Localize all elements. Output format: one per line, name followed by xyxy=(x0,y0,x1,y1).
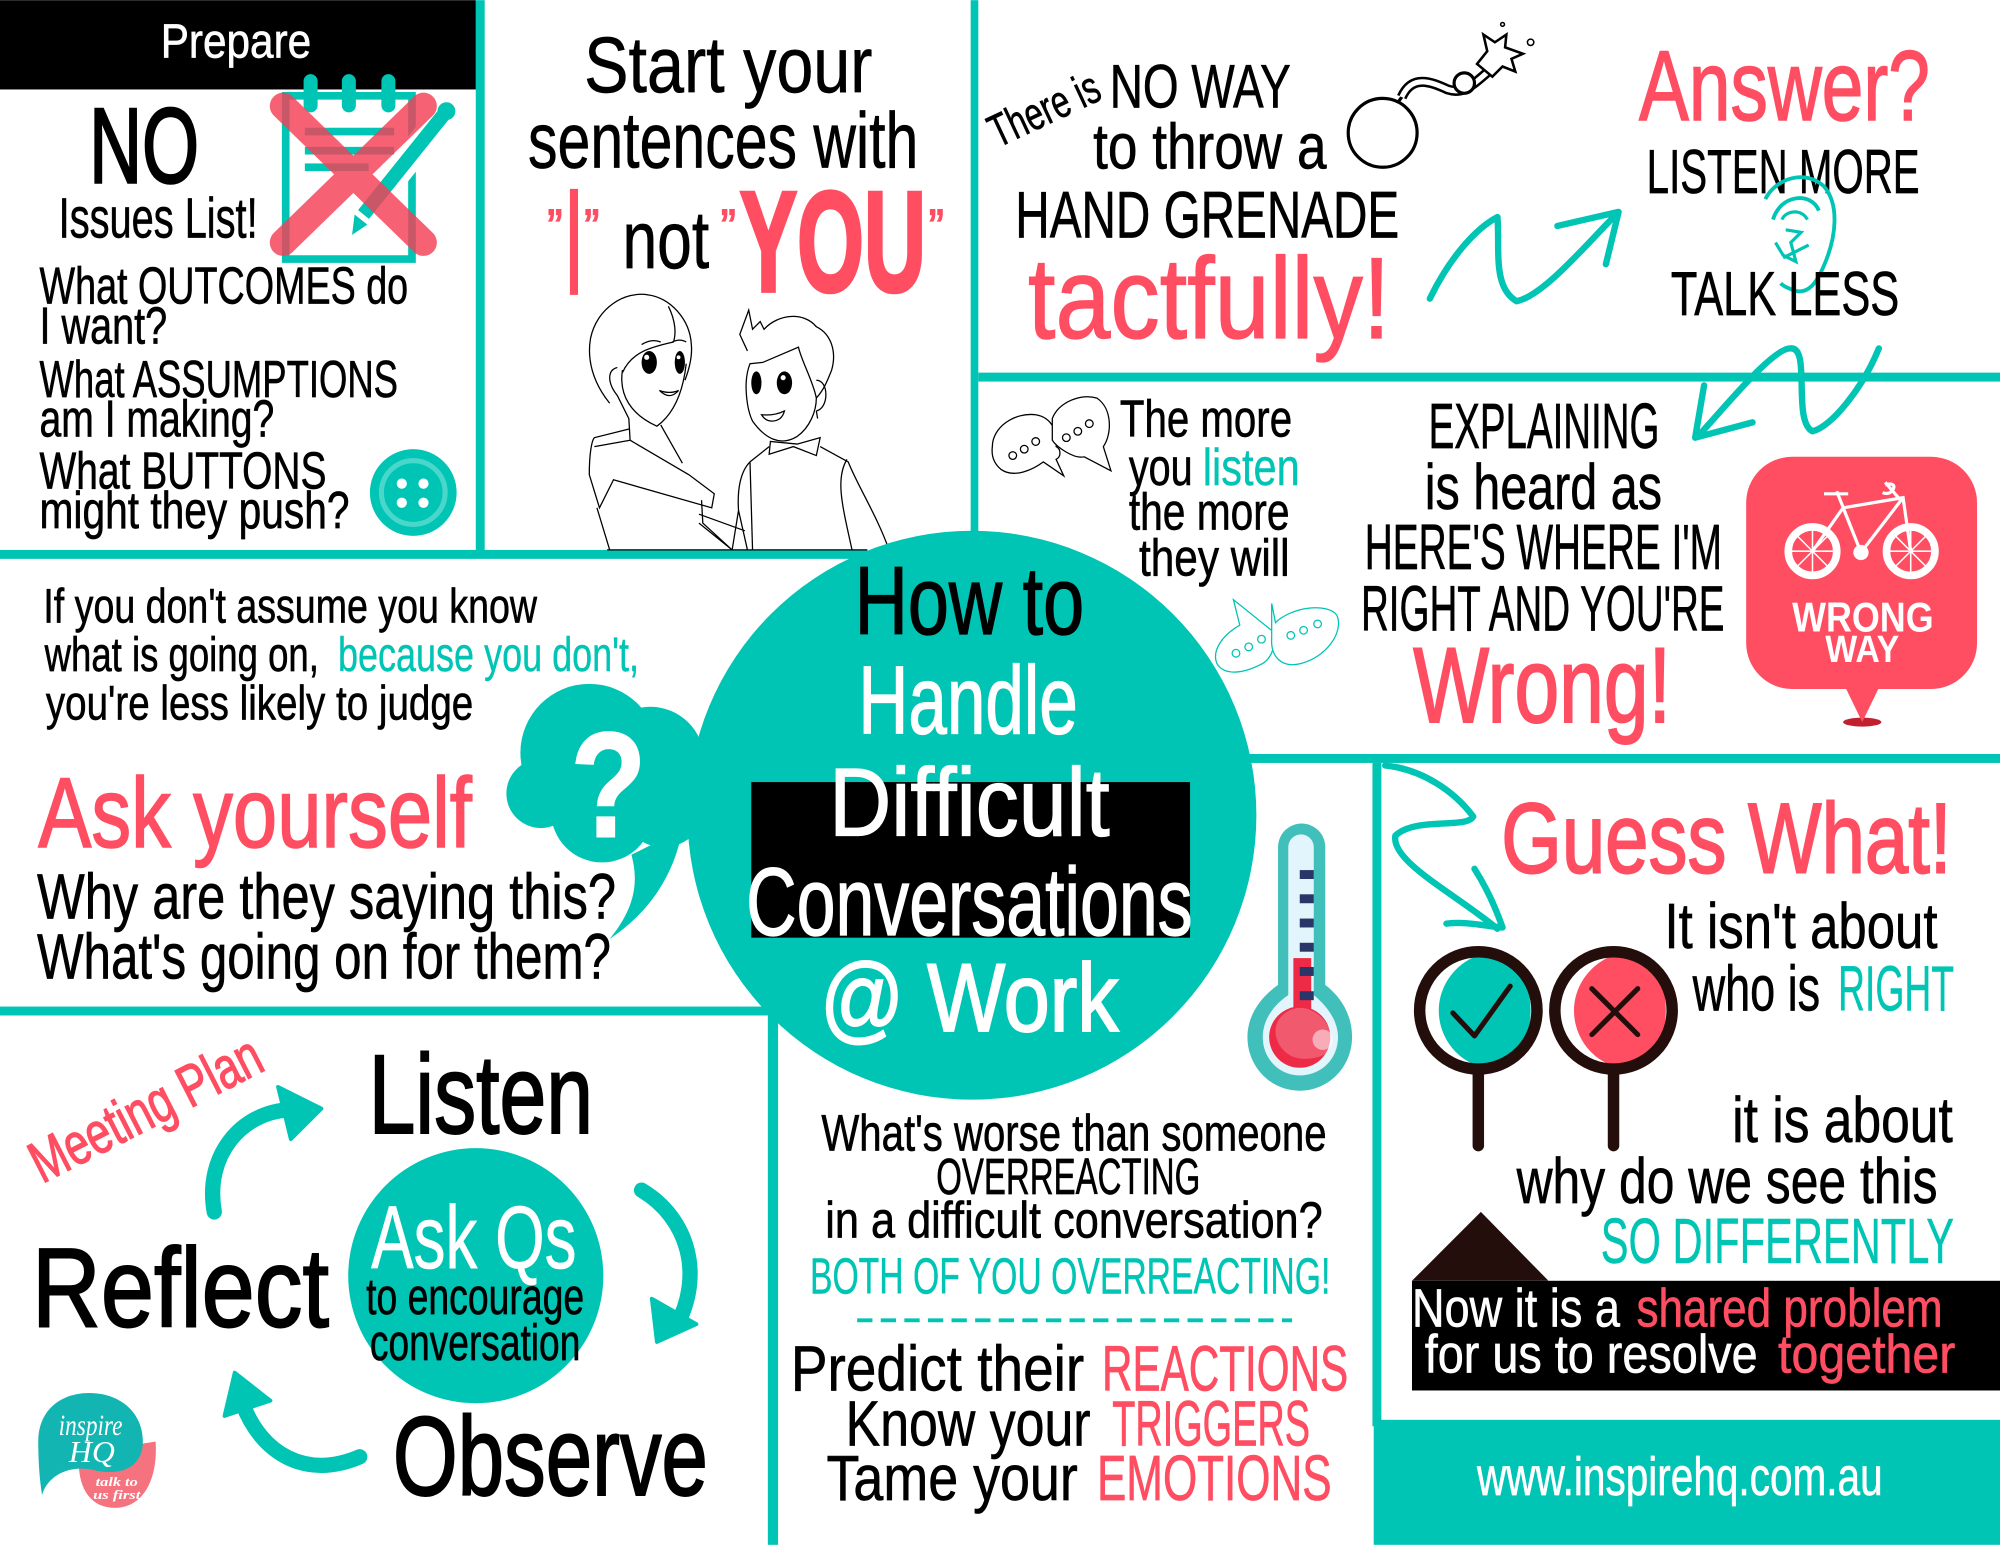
arrow: explaining to guess what xyxy=(1385,765,1503,929)
text: preparation questions: What ASSUMPTIONS xyxy=(40,351,398,409)
panel: overreacting xyxy=(791,1105,1348,1514)
text: reflect: Reflect xyxy=(32,1225,329,1351)
callout: shared problem: together xyxy=(1778,1326,1955,1385)
icon: wrong way sign: WRONG xyxy=(1792,594,1934,641)
text: it isn't about who is right: It isn't about xyxy=(1665,890,1938,962)
panel: the more you listen xyxy=(992,390,1339,672)
text: no way to throw a hand grenade: to throw a xyxy=(1093,111,1327,183)
panel: hand grenade xyxy=(980,22,1534,363)
text: the more you listen: they will xyxy=(1139,529,1290,587)
text: it isn't about who is right: who is xyxy=(1692,952,1820,1024)
text: assumptions paragraph: because you don't, xyxy=(338,628,639,682)
text: preparation questions: am I making? xyxy=(40,390,274,448)
text: predict know tame: Predict their xyxy=(791,1332,1084,1404)
text: I not YOU: not xyxy=(622,195,709,286)
text: There is: There is xyxy=(980,60,1108,157)
logo: inspire HQ xyxy=(38,1393,156,1508)
footer: website: www.inspirehq.com.au xyxy=(1476,1448,1883,1507)
icon: button xyxy=(370,449,457,536)
text: what's worse: OVERREACTING xyxy=(936,1148,1200,1205)
title text: Difficult xyxy=(829,748,1110,857)
icon: tick magnifier xyxy=(1420,952,1537,1146)
title text: Handle xyxy=(858,646,1078,755)
text: Issues List: Issues List! xyxy=(59,186,258,249)
panel: ask yourself xyxy=(37,580,639,992)
text: I not YOU: ” xyxy=(547,199,562,256)
text: the more you listen: The more xyxy=(1120,390,1292,448)
icon: ear xyxy=(1765,177,1835,291)
text: preparation questions: I want? xyxy=(40,297,167,355)
ask questions circle: conversation xyxy=(370,1314,580,1371)
icon: crossed out notepad xyxy=(283,74,455,259)
title circle xyxy=(506,531,1256,1100)
icon: wrong way sign xyxy=(1746,457,1977,727)
icon: bomb xyxy=(1348,22,1534,167)
text: start your sentences with: Start your xyxy=(584,20,872,109)
text: meeting plan: Meeting Plan xyxy=(18,1023,273,1195)
text: observe: Observe xyxy=(393,1393,708,1519)
text: preparation questions xyxy=(40,258,408,540)
panel: explaining xyxy=(1361,390,1977,745)
footer: website xyxy=(1374,1420,2000,1545)
text: predict know tame: Tame your xyxy=(827,1442,1078,1514)
text: it is about why xyxy=(1516,1084,1954,1277)
ask questions circle: to encourage xyxy=(366,1268,584,1325)
illustration: couple talking xyxy=(589,294,889,550)
text: explaining is heard as: is heard as xyxy=(1425,451,1662,523)
text: explaining is heard as: EXPLAINING xyxy=(1429,390,1659,462)
panel: prepare xyxy=(0,0,476,540)
icon: teal speech bubbles xyxy=(1216,600,1339,672)
decorative triangle xyxy=(1412,1212,1548,1281)
title text: @ Work xyxy=(820,943,1119,1052)
text: predict know tame: Know your xyxy=(846,1387,1091,1459)
callout: shared problem xyxy=(1412,1280,2000,1390)
text: why are they saying this xyxy=(37,861,616,992)
callout: shared problem: shared problem xyxy=(1636,1280,1943,1339)
text: I not YOU: I xyxy=(566,163,582,322)
text: NO: NO xyxy=(89,86,199,206)
icon: black speech bubbles xyxy=(992,397,1111,476)
text: what's worse: in a difficult conversation? xyxy=(825,1191,1323,1248)
text: what's worse: What's worse than someone xyxy=(821,1105,1327,1162)
text: explaining is heard as: HERE'S WHERE I'M xyxy=(1365,511,1722,583)
arrow: listen to observe xyxy=(642,1190,696,1342)
text: talk less: TALK LESS xyxy=(1671,259,1899,329)
text: start your sentences with: sentences with xyxy=(528,95,918,184)
text: it is about why: it is about xyxy=(1732,1084,1953,1156)
text: start your sentences with xyxy=(528,20,918,184)
text: assumptions paragraph: you're less likely to judge xyxy=(46,677,473,731)
icon: thermometer xyxy=(1247,824,1352,1091)
ask questions circle xyxy=(348,1148,603,1403)
logo: inspire HQ: inspire xyxy=(59,1410,122,1442)
text: explaining is heard as: RIGHT AND YOU'RE xyxy=(1361,572,1724,644)
callout: shared problem: for us to resolve xyxy=(1425,1326,1758,1385)
panel: guess what xyxy=(1385,765,2000,1390)
text: what's worse xyxy=(821,1105,1327,1248)
title black band xyxy=(751,782,1190,938)
text: both of you overreacting: BOTH OF YOU OVERREACTING! xyxy=(810,1248,1330,1305)
ask questions circle: Ask Qs xyxy=(371,1187,577,1287)
text: preparation questions: What OUTCOMES do xyxy=(40,258,408,316)
text: no way to throw a hand grenade: HAND GRENADE xyxy=(1015,178,1399,252)
panel: meeting plan xyxy=(18,1023,708,1519)
text: no way to throw a hand grenade: NO WAY xyxy=(1110,52,1291,120)
icon: wrong way sign: WAY xyxy=(1825,628,1899,671)
panel: answer xyxy=(1639,31,1930,329)
title text: How to xyxy=(855,546,1084,655)
text: predict know tame: TRIGGERS xyxy=(1112,1387,1310,1459)
text: listen: Listen xyxy=(369,1031,593,1157)
text: preparation questions: might they push? xyxy=(40,482,349,540)
logo: inspire HQ: HQ xyxy=(68,1435,115,1469)
text: the more you listen: the more xyxy=(1129,484,1290,542)
text: I not YOU xyxy=(547,163,944,322)
prepare header bar xyxy=(0,0,476,89)
icon: cross magnifier xyxy=(1555,952,1672,1146)
text: the more you listen: you xyxy=(1129,439,1193,497)
panel: start your sentences xyxy=(528,20,944,550)
text: why are they saying this: What's going on for them? xyxy=(37,920,611,992)
arrow: grenade to answer xyxy=(1430,212,1619,301)
text: I not YOU: ” xyxy=(584,199,599,256)
arrow: answer to explaining xyxy=(1695,348,1879,438)
text: predict know tame xyxy=(791,1332,1348,1514)
text: assumptions paragraph xyxy=(43,580,639,731)
text: I not YOU: YOU xyxy=(740,163,926,322)
icon: question cloud: ? xyxy=(570,701,647,869)
logo: inspire HQ: talk to xyxy=(96,1475,138,1489)
text: explaining is heard as xyxy=(1361,390,1724,644)
title text xyxy=(746,546,1193,1052)
callout: shared problem: Now it is a xyxy=(1412,1280,1620,1339)
heading: ask yourself: Ask yourself xyxy=(38,758,472,869)
text: it isn't about who is right xyxy=(1665,890,1954,1024)
text: I not YOU: ” xyxy=(929,199,944,256)
text: wrong: Wrong! xyxy=(1413,625,1671,745)
arrow: reflect to listen xyxy=(213,1087,321,1212)
arrow: observe to reflect xyxy=(224,1373,360,1465)
heading: Prepare: Prepare xyxy=(161,15,311,69)
text: assumptions paragraph: If you don't assume you know xyxy=(43,580,538,634)
text: the more you listen: listen xyxy=(1203,439,1300,497)
text: predict know tame: EMOTIONS xyxy=(1097,1442,1332,1514)
text: why are they saying this: Why are they saying this? xyxy=(37,861,616,933)
text: assumptions paragraph: what is going on, xyxy=(44,628,319,682)
title text: Conversations xyxy=(746,847,1193,956)
logo: inspire HQ: us first xyxy=(93,1488,141,1502)
text: preparation questions: What BUTTONS xyxy=(40,443,327,501)
text: no way to throw a hand grenade xyxy=(1015,52,1399,252)
text: predict know tame: REACTIONS xyxy=(1102,1332,1348,1404)
text: tactfully: tactfully! xyxy=(1028,235,1390,363)
text: I not YOU: ” xyxy=(721,199,736,256)
text: the more you listen xyxy=(1120,390,1300,587)
icon: question cloud xyxy=(506,684,707,939)
